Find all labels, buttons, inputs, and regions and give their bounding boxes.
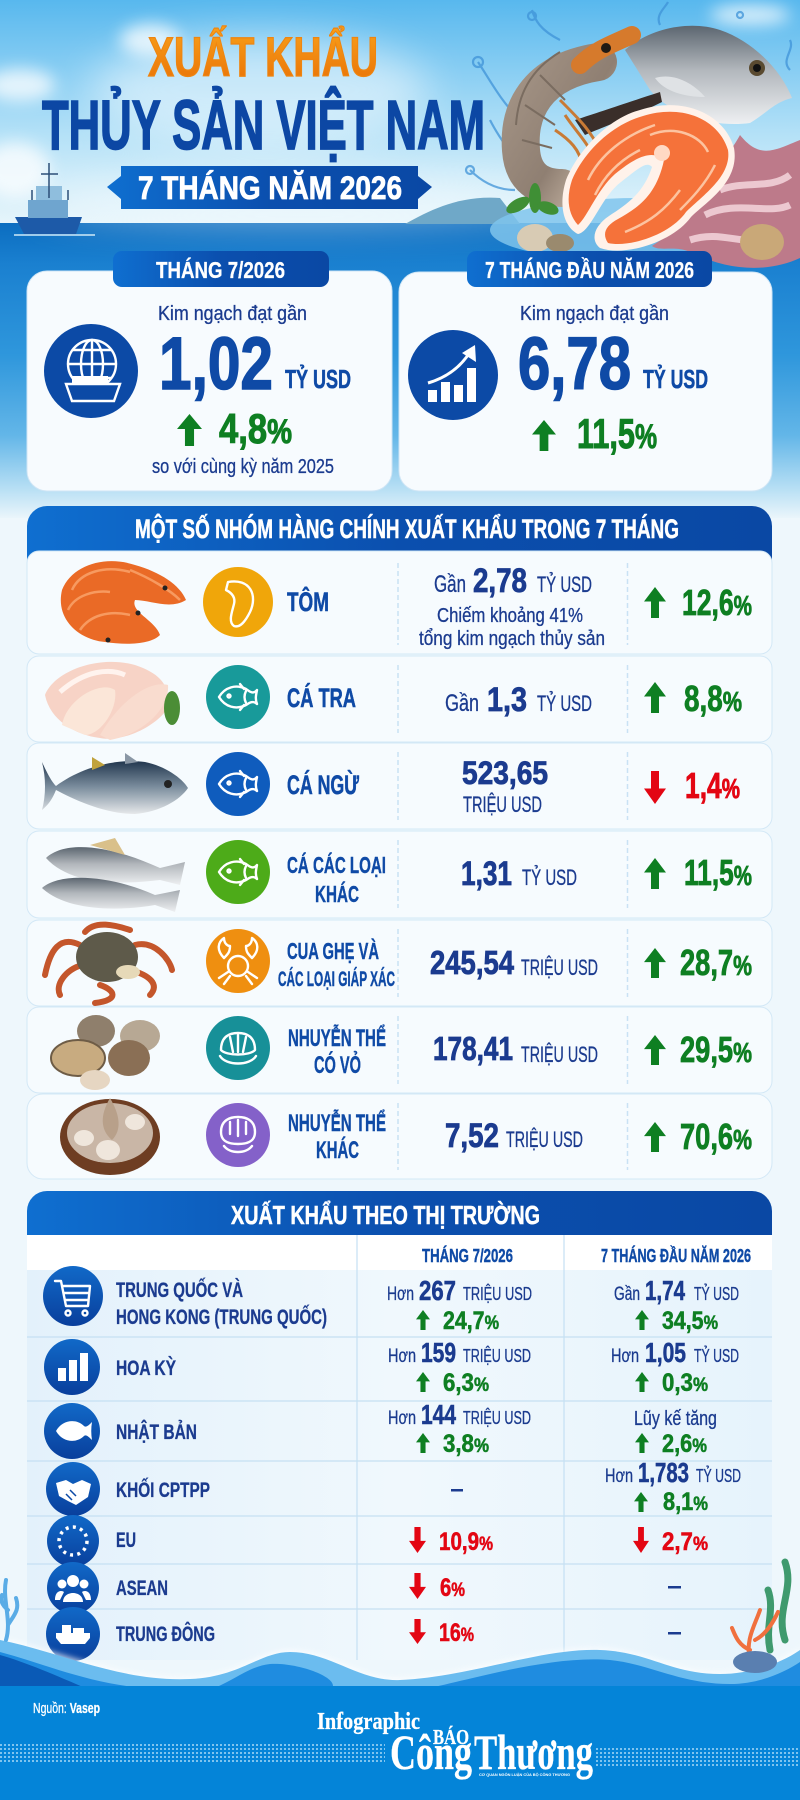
first 7 months: 34,5% <box>662 1307 718 1335</box>
market: ASEAN <box>47 1562 681 1614</box>
title line 2: THỦY SẢN VIỆT NAM <box>42 85 485 164</box>
change <box>644 942 752 983</box>
name: CÓ VỎ <box>314 1050 361 1079</box>
July: no data <box>451 1489 463 1492</box>
icon: fish <box>44 1403 100 1459</box>
salmon steak <box>562 105 735 251</box>
name: KHỐI CPTPP <box>116 1478 210 1502</box>
food: shrimp <box>61 561 186 644</box>
July: Hơn <box>388 1408 416 1429</box>
food: clams <box>51 1015 160 1090</box>
July: 159 <box>421 1337 456 1368</box>
name: CÁ TRA <box>287 682 356 713</box>
first 7 months: Lũy kế tăng <box>634 1408 717 1430</box>
value: TỶ USD <box>537 691 592 716</box>
header: XUẤT KHẨU THEO THỊ TRƯỜNG <box>231 1200 540 1230</box>
name: NHUYỄN THỂ <box>288 1023 386 1052</box>
July: TRIỆU USD <box>463 1408 531 1428</box>
food: two fish <box>42 838 185 912</box>
icon: shrimp <box>203 567 273 637</box>
first 7 months <box>633 1527 708 1556</box>
name: TRUNG ĐÔNG <box>116 1622 215 1646</box>
value <box>419 562 605 650</box>
seafood collage <box>466 2 800 268</box>
change: 11,5% <box>577 410 657 457</box>
icon: stars <box>47 1515 99 1567</box>
value: TRIỆU USD <box>521 955 598 980</box>
value: 6,78 <box>518 322 631 405</box>
icon: fish <box>206 752 270 816</box>
clams <box>517 224 784 260</box>
ship <box>14 163 95 235</box>
July <box>388 1337 531 1397</box>
value <box>445 681 592 719</box>
icon: people <box>47 1562 99 1614</box>
row: shrimp <box>27 551 772 654</box>
name: CÁ CÁC LOẠI <box>287 851 386 878</box>
July <box>388 1399 531 1458</box>
first 7 months: 1,783 <box>638 1457 689 1488</box>
name: HONG KONG (TRUNG QUỐC) <box>116 1305 327 1329</box>
dotted band left <box>0 1743 385 1763</box>
row backgrounds <box>27 1270 772 1660</box>
July: Hơn <box>387 1284 414 1305</box>
logo: CƠ QUAN NGÔN LUẬN CỦA BỘ CÔNG THƯƠNG <box>479 1772 570 1777</box>
July: TRIỆU USD <box>463 1284 532 1304</box>
first 7 months: Hơn <box>605 1466 633 1487</box>
row: other fish <box>27 831 772 918</box>
July: 6,3% <box>443 1369 489 1397</box>
value: TỶ USD <box>522 865 577 890</box>
background: page <box>0 500 800 1690</box>
name <box>288 1023 386 1079</box>
header <box>27 1191 772 1235</box>
value: tổng kim ngạch thủy sản <box>419 628 605 650</box>
value: TRIỆU USD <box>506 1127 583 1152</box>
value: 1,31 <box>461 855 512 893</box>
panel: July 2026 <box>27 251 392 491</box>
row: other molluscs <box>27 1094 772 1179</box>
first 7 months <box>605 1457 741 1516</box>
distant mountain <box>405 198 520 224</box>
fish <box>625 26 792 124</box>
tab <box>467 251 712 287</box>
value: TRIỆU USD <box>463 792 542 817</box>
value: 1,02 <box>159 322 273 405</box>
change <box>644 1116 752 1157</box>
change: 1,4% <box>685 765 740 806</box>
tab <box>113 251 329 287</box>
name <box>278 937 395 991</box>
value: 245,54 <box>430 944 515 981</box>
July: TRIỆU USD <box>463 1346 531 1366</box>
logo: Thương <box>474 1724 593 1780</box>
arrow up <box>177 414 202 446</box>
market: CPTPP <box>46 1457 741 1516</box>
value: 7,52 <box>445 1117 499 1155</box>
name: TÔM <box>287 586 329 617</box>
icon: growth chart <box>408 330 498 420</box>
title line 1: XUẤT KHẨU <box>148 25 378 88</box>
market: Middle East <box>46 1607 681 1661</box>
first 7 months: 2,7% <box>662 1528 708 1556</box>
clouds <box>0 5 790 198</box>
shrimp <box>516 35 662 188</box>
logo <box>317 1709 593 1780</box>
icon: bars <box>44 1339 100 1395</box>
July <box>409 1573 465 1602</box>
value: 2,78 <box>473 562 527 600</box>
footer <box>0 1686 800 1800</box>
value: TỶ USD <box>537 572 592 597</box>
July: 24,7% <box>443 1307 499 1335</box>
change: 4,8% <box>219 405 292 452</box>
change: 70,6% <box>680 1116 752 1157</box>
change: 29,5% <box>680 1029 752 1070</box>
label: Kim ngạch đạt gần <box>520 303 669 325</box>
name: KHÁC <box>315 880 359 907</box>
title <box>42 25 485 164</box>
icon: ship <box>46 1607 100 1661</box>
first 7 months: TỶ USD <box>694 1345 739 1366</box>
July: 3,8% <box>443 1430 489 1458</box>
icon: mollusc <box>206 1103 270 1167</box>
value: 178,41 <box>433 1030 513 1067</box>
food: tuna <box>42 753 188 814</box>
table background <box>27 1235 772 1660</box>
July: 6% <box>440 1574 465 1602</box>
July: Hơn <box>388 1346 416 1367</box>
icon: fish <box>206 840 270 904</box>
row: crab <box>27 920 772 1006</box>
logo: Infographic <box>317 1709 420 1735</box>
panel: main product groups <box>27 506 772 1179</box>
row: tuna <box>27 743 772 829</box>
name: NHẬT BẢN <box>116 1420 197 1444</box>
value <box>461 855 577 893</box>
icon: handshake <box>46 1462 100 1516</box>
name: NHUYỄN THỂ <box>288 1108 386 1137</box>
change <box>644 582 752 623</box>
change <box>644 1029 752 1070</box>
first 7 months <box>634 1408 717 1458</box>
change <box>644 765 740 806</box>
value: Gần <box>445 690 479 717</box>
unit: TỶ USD <box>643 364 708 394</box>
first 7 months: 2,6% <box>662 1430 707 1458</box>
food: fillets <box>45 662 180 740</box>
splash base <box>490 198 790 262</box>
July <box>409 1527 493 1556</box>
July: 10,9% <box>439 1528 493 1556</box>
change <box>644 852 752 893</box>
market: China <box>43 1266 739 1335</box>
name: TRUNG QUỐC VÀ <box>116 1278 243 1302</box>
seaweed left <box>1 1580 17 1640</box>
first 7 months: no data <box>668 1632 681 1634</box>
change: 8,8% <box>684 678 742 719</box>
first 7 months <box>611 1337 739 1397</box>
icon: fish <box>206 665 270 729</box>
first 7 months: 8,1% <box>663 1488 708 1516</box>
first 7 months: Gần <box>614 1284 640 1305</box>
water splash <box>466 2 791 190</box>
July: 144 <box>421 1399 456 1430</box>
subtitle banner: 7 THÁNG NĂM 2026 <box>138 170 402 206</box>
first 7 months: no data <box>668 1586 681 1588</box>
seaweed and coral right <box>732 1562 788 1673</box>
food: bowl <box>60 1098 160 1175</box>
value <box>445 1117 583 1155</box>
change: 28,7% <box>680 942 752 983</box>
panel: export by market <box>27 1191 772 1661</box>
July <box>409 1619 474 1647</box>
squid <box>652 135 800 268</box>
name: ASEAN <box>116 1577 168 1600</box>
value: Gần <box>434 571 466 598</box>
first 7 months <box>614 1275 739 1335</box>
change: 12,6% <box>682 582 752 623</box>
value: TRIỆU USD <box>521 1042 598 1067</box>
logo: BÁO <box>433 1725 469 1749</box>
first 7 months: Hơn <box>611 1346 639 1367</box>
wave <box>0 1638 800 1690</box>
header <box>27 506 772 570</box>
value <box>462 755 548 817</box>
value <box>430 944 598 981</box>
name: CÁ NGỪ <box>287 769 359 800</box>
market: EU <box>47 1515 708 1567</box>
first 7 months: 0,3% <box>662 1369 708 1397</box>
name: EU <box>116 1529 136 1552</box>
name: HOA KỲ <box>116 1356 176 1380</box>
note: so với cùng kỳ năm 2025 <box>152 456 334 478</box>
food: crab <box>45 925 172 1003</box>
name <box>116 1278 327 1329</box>
value <box>433 1030 598 1067</box>
label: Kim ngạch đạt gần <box>158 303 307 325</box>
icon: globe and ship <box>44 324 138 418</box>
panel: first 7 months 2026 <box>399 251 772 491</box>
name: CÁC LOẠI GIÁP XÁC <box>278 968 395 991</box>
row: pangasius <box>27 656 772 742</box>
name <box>288 1108 386 1164</box>
logo: Công <box>390 1724 472 1780</box>
value: 523,65 <box>462 755 548 791</box>
market: USA <box>44 1337 739 1397</box>
name: CUA GHẸ VÀ <box>287 937 379 964</box>
first 7 months: 1,05 <box>645 1337 686 1368</box>
soft light behind title <box>40 35 560 222</box>
icon: shell <box>206 1016 270 1080</box>
July <box>387 1275 532 1335</box>
arrow up <box>532 420 556 451</box>
row: shelled molluscs <box>27 1007 772 1093</box>
tab: 7 THÁNG ĐẦU NĂM 2026 <box>485 256 694 283</box>
icon: crab <box>206 929 270 993</box>
icon: cart <box>43 1266 103 1326</box>
value: 1,3 <box>487 681 527 719</box>
parsley <box>504 183 560 217</box>
change: 11,5% <box>684 852 752 893</box>
July: 16% <box>439 1619 474 1647</box>
July: 267 <box>419 1275 456 1306</box>
name: KHÁC <box>316 1136 359 1164</box>
unit: TỶ USD <box>285 364 351 394</box>
background: sky <box>0 0 800 224</box>
market: Japan <box>44 1399 717 1459</box>
background: sea <box>0 223 800 518</box>
change <box>644 678 742 719</box>
name <box>287 851 386 907</box>
first 7 months: TỶ USD <box>694 1283 739 1304</box>
dotted band right <box>596 1748 800 1768</box>
first 7 months: TỶ USD <box>696 1465 741 1486</box>
value: Chiếm khoảng 41% <box>437 605 583 627</box>
column heading: July: THÁNG 7/2026 <box>422 1245 513 1266</box>
source: Nguồn: Vasep <box>33 1700 100 1717</box>
tab: THÁNG 7/2026 <box>156 256 285 283</box>
first 7 months: 1,74 <box>645 1275 685 1306</box>
